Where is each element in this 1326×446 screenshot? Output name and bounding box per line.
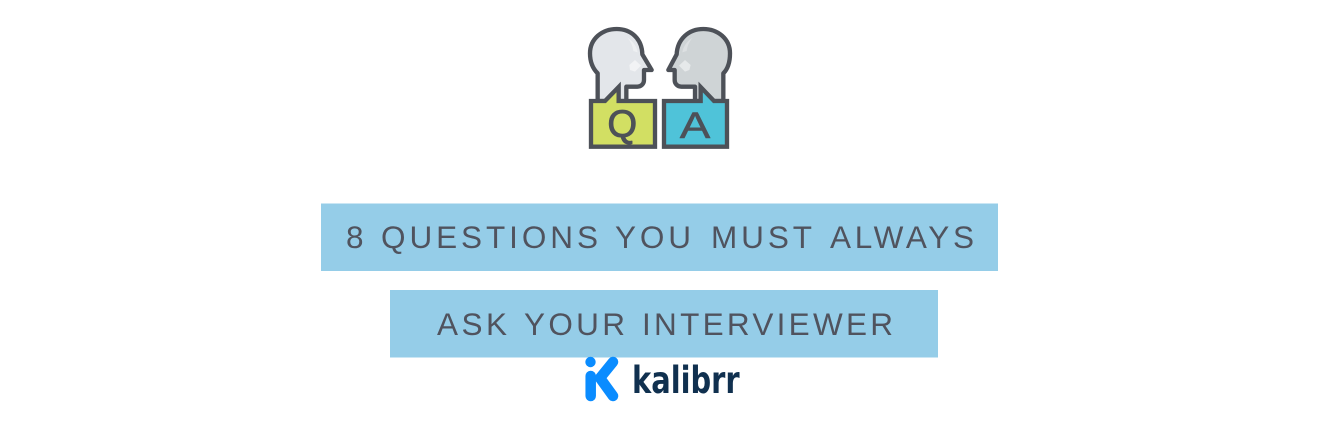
- icon: right head: [668, 29, 730, 101]
- logo wordmark: kalibrr: [632, 358, 740, 402]
- icon: kalibrr mark: [585, 357, 613, 396]
- heading line 2: INTERVIEWER: [642, 306, 893, 342]
- icon: Q speech box: Q: [608, 103, 637, 145]
- heading line 1: QUESTIONS: [381, 219, 598, 255]
- heading line 1: 8: [346, 219, 364, 255]
- heading line 2: [390, 290, 938, 358]
- icon: Q and A heads: [590, 29, 730, 147]
- heading line 2: ASK: [437, 306, 507, 342]
- logo: kalibrr: [585, 357, 740, 402]
- icon: left head: [590, 29, 652, 101]
- heading line 1: [321, 204, 998, 271]
- heading line 1: MUST: [711, 219, 812, 255]
- heading line 1: YOU: [615, 219, 691, 255]
- heading line 1: ALWAYS: [830, 219, 974, 255]
- heading line 2: YOUR: [524, 306, 625, 342]
- icon: A speech box: A: [680, 104, 711, 146]
